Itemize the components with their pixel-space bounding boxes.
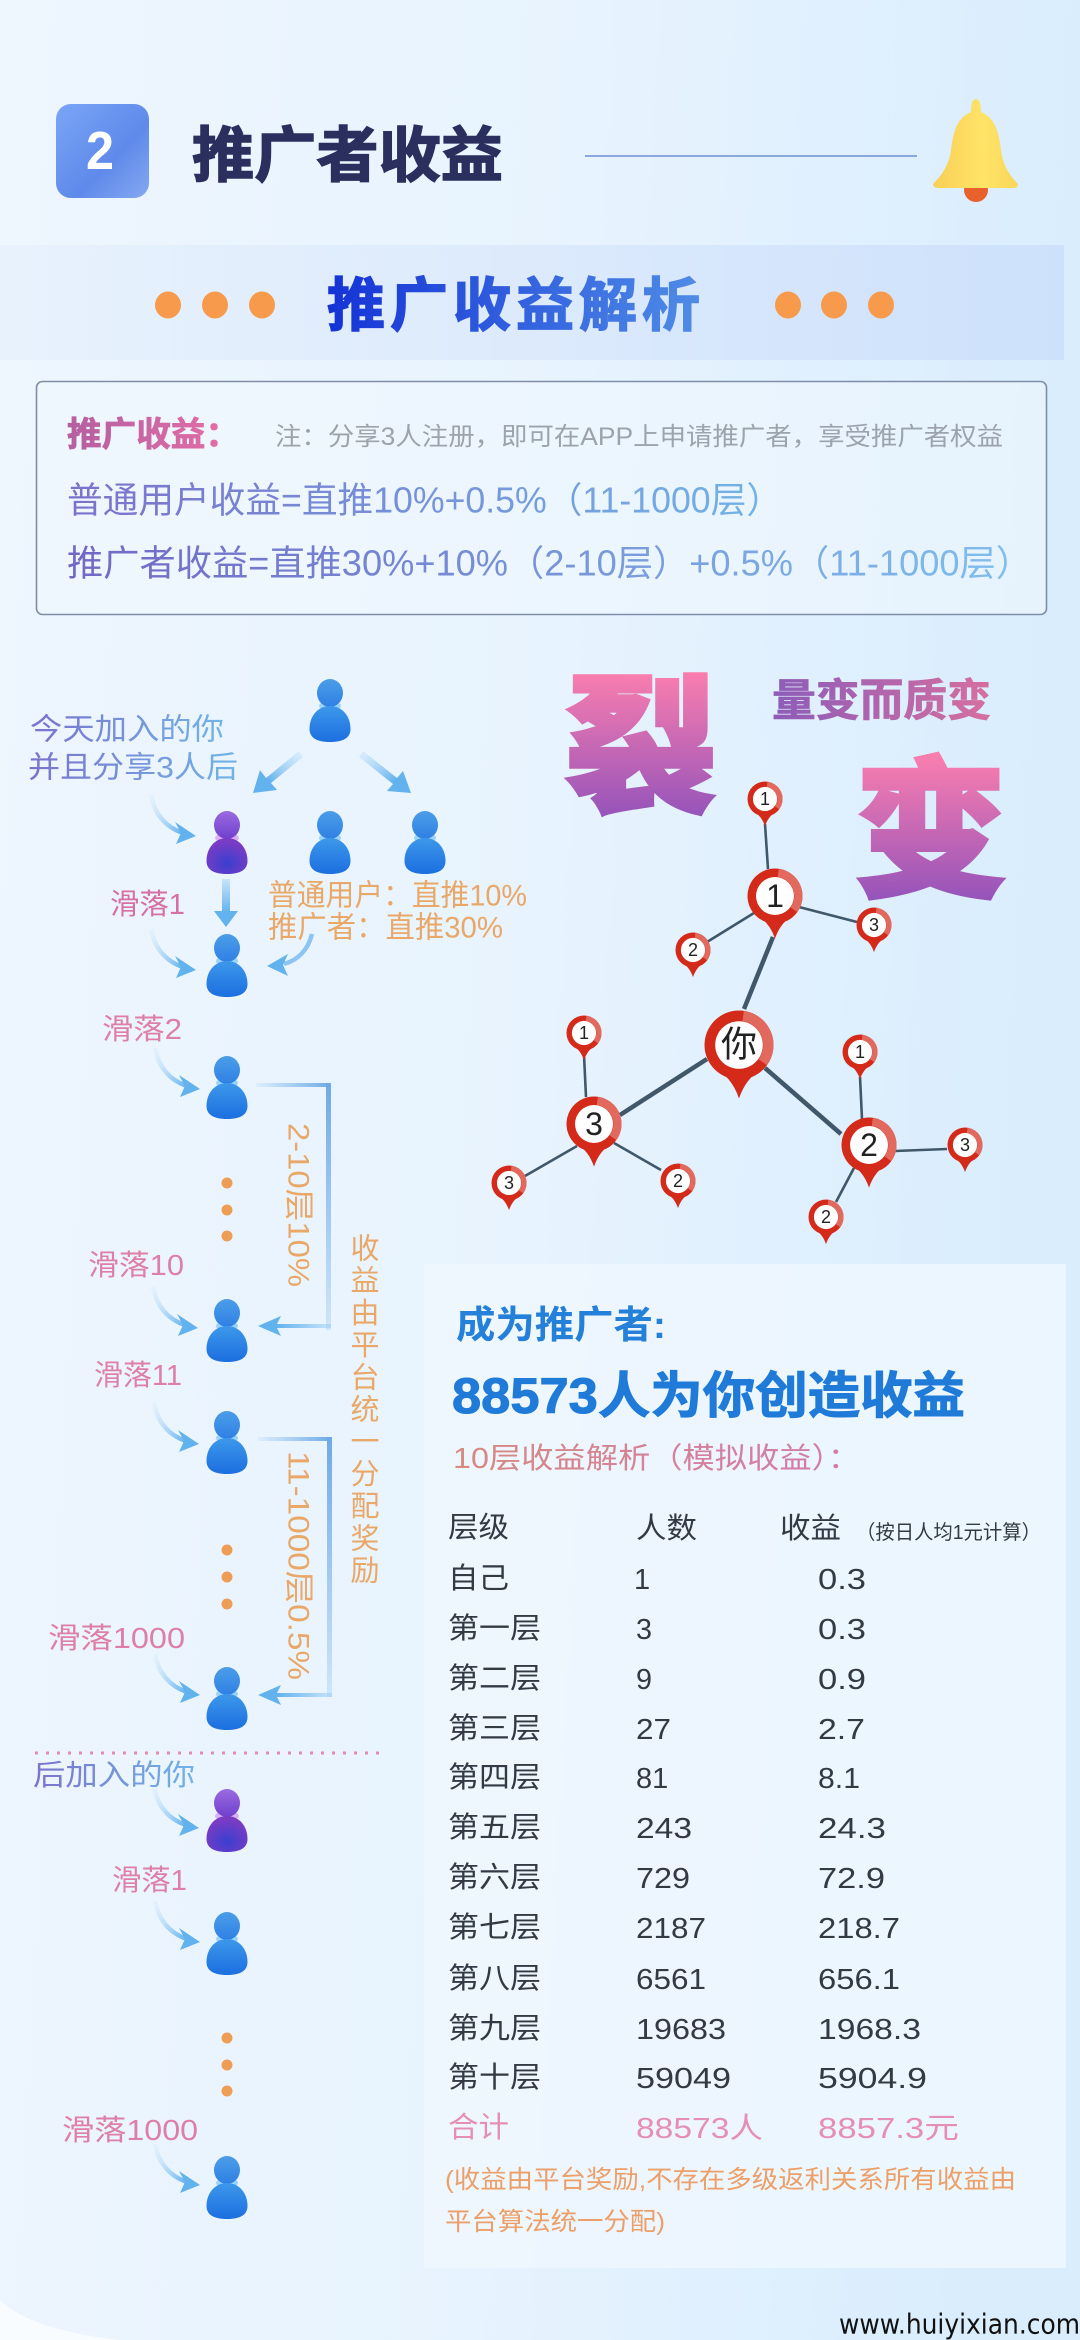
section badge: number 2: [56, 104, 149, 198]
pin: 3-3: 3: [504, 1173, 514, 1193]
label: later slide 1000: 滑落1000: [62, 2114, 198, 2147]
table header row: 人数: [636, 1512, 697, 1545]
network links: [525, 824, 947, 1202]
row: level 8: 第八层: [448, 1962, 541, 1995]
person: sibling one: [310, 811, 350, 874]
person: later slide 1000: [206, 2156, 248, 2219]
person: later slide 1: [206, 1912, 248, 1975]
table header row: （按日人均1元计算）: [856, 1521, 1041, 1544]
dots: omitted levels 12-999: [222, 1544, 232, 1610]
pin: branch 1: 1: [766, 878, 784, 914]
pin: 2-1: [842, 1034, 878, 1079]
row: level 9: 1968.3: [818, 2014, 921, 2046]
panel heading: 推广收益：: [67, 416, 240, 454]
person: later joiner: [206, 1789, 248, 1852]
label: slide 10: 滑落10: [88, 1249, 184, 1282]
pin: 1-1: [748, 782, 782, 826]
pin: 3-1: [566, 1016, 602, 1060]
label: after sharing: 并且分享3人后: [28, 752, 238, 784]
row: level 5: 24.3: [818, 1813, 886, 1845]
footnote: [445, 2166, 1016, 2236]
arrow: slide 1: [151, 929, 196, 978]
row: total: 合计: [448, 2111, 509, 2144]
pin: 2-1: 1: [855, 1042, 865, 1062]
row: level 2: 0.9: [818, 1664, 866, 1696]
pin: 1-1: 1: [760, 789, 770, 809]
row: level 4: 第四层: [448, 1761, 541, 1794]
bracket: levels 11-1000: [258, 1437, 332, 1705]
row: level 3: 2.7: [818, 1714, 865, 1746]
pin: 2-3: [948, 1128, 982, 1172]
bracket: levels 2-10: [256, 1083, 331, 1336]
pin: you: [704, 1010, 774, 1098]
pin: branch 1: [748, 868, 802, 939]
label: later slide 1: 滑落1: [112, 1864, 187, 1897]
pin: branch 2: 2: [860, 1127, 878, 1163]
label: slide 1: 滑落1: [110, 888, 185, 921]
row: level 2: 第二层: [448, 1662, 541, 1695]
row: level 4: [448, 1761, 860, 1795]
row: level 1: 0.3: [818, 1614, 866, 1646]
person: slide 11: [206, 1411, 248, 1474]
row: level 10: [448, 2061, 927, 2095]
label: levels 2-10 rate: 2-10层10%: [282, 1123, 314, 1287]
panel: earnings table: [424, 1264, 1066, 2268]
row: self: 自己: [448, 1562, 509, 1595]
row: level 7: 第七层: [448, 1911, 541, 1944]
formula: regular user: 普通用户收益=直推10%+0.5%（11-1000层）: [67, 480, 782, 520]
pin: branch 3: 3: [585, 1106, 603, 1142]
pin: 1-2: 2: [688, 940, 698, 960]
label: direct commission rates: [268, 880, 527, 944]
banner: 推广收益解析: [0, 245, 1064, 360]
row: level 1: 第一层: [448, 1612, 541, 1645]
row: total: [448, 2111, 959, 2145]
label: later joiner: 后加入的你: [33, 1759, 195, 1792]
row: level 3: 第三层: [448, 1712, 541, 1745]
label: levels 11-1000 rate: 11-1000层0.5%: [282, 1451, 314, 1680]
divider: later joiners: [35, 1752, 380, 1754]
row: self: [448, 1562, 866, 1596]
row: level 10: 第十层: [448, 2061, 541, 2094]
heading: 裂: 裂: [565, 665, 717, 833]
pin: you: 你: [721, 1024, 757, 1064]
arrow: later slide 1000: [155, 2144, 200, 2193]
pin: 3-2: [660, 1164, 696, 1208]
person: slide 2: [206, 1056, 248, 1119]
pin: 1-3: [856, 908, 892, 952]
heading: 变: 变: [855, 748, 1007, 916]
note text: 注：分享3人注册，即可在APP上申请推广者，享受推广者权益: [275, 423, 1003, 451]
label: platform distribution: 收益由平台统一分配奖励: [346, 1233, 380, 1587]
person: slide 10: [206, 1299, 248, 1362]
row: level 6: 729: [636, 1863, 690, 1895]
label: slide 1000: 滑落1000: [48, 1622, 185, 1655]
footnote: (收益由平台奖励,不存在多级返利关系所有收益由: [445, 2166, 1016, 2194]
row: level 5: 第五层: [448, 1811, 541, 1844]
row: level 5: [448, 1811, 886, 1845]
row: self: 0.3: [818, 1564, 866, 1596]
arrow: later slide 1: [155, 1901, 200, 1950]
label: slide 11: 滑落11: [94, 1359, 182, 1392]
row: level 9: 第九层: [448, 2012, 541, 2045]
pin: 3-2: 2: [673, 1171, 683, 1191]
row: level 8: 6561: [636, 1964, 706, 1996]
label: direct commission rates: 普通用户：直推10%: [268, 880, 527, 912]
pin: 2-3: 3: [960, 1135, 970, 1155]
row: level 6: 72.9: [818, 1863, 885, 1895]
pin: 2-2: [808, 1200, 844, 1244]
table header row: [448, 1511, 1041, 1545]
row: level 4: 8.1: [818, 1763, 860, 1795]
row: level 7: [448, 1911, 900, 1945]
section title: 推广者收益: [192, 122, 503, 190]
arrow: to left child: [253, 751, 303, 793]
row: level 1: 3: [636, 1614, 652, 1646]
row: level 10: 5904.9: [818, 2063, 927, 2095]
row: level 4: 81: [636, 1763, 668, 1795]
pin: 1-3: 3: [869, 915, 879, 935]
network diagram: [492, 782, 982, 1244]
arrow: to later joiner: [154, 1787, 199, 1836]
pin: 3-3: [492, 1166, 526, 1210]
person: sibling two: [404, 811, 446, 874]
row: level 8: [448, 1962, 900, 1996]
panel: earnings formulas: [36, 382, 1046, 614]
section badge: number 2: 2: [86, 121, 114, 181]
arrow: slide 11: [154, 1403, 199, 1452]
footnote: 平台算法统一分配): [445, 2208, 665, 2236]
banner right dots: [775, 292, 894, 318]
arrow: slide 1000: [155, 1654, 200, 1703]
row: level 3: 27: [636, 1714, 671, 1746]
headline number: 88573人为你创造收益: [452, 1368, 965, 1424]
row: level 9: [448, 2012, 921, 2046]
row: level 6: 第六层: [448, 1861, 541, 1894]
banner title: 推广收益解析: [327, 274, 700, 338]
icon: bell: [933, 99, 1018, 202]
person: top referrer: [310, 679, 350, 742]
row: level 5: 243: [636, 1813, 692, 1845]
arrow: slide 10: [153, 1287, 198, 1336]
arrow: slide 2: [155, 1048, 200, 1097]
label: slide 2: 滑落2: [102, 1013, 182, 1046]
dots: later omitted levels: [222, 2032, 232, 2096]
banner left dots: [155, 292, 275, 318]
panel heading: 成为推广者:: [456, 1305, 666, 1347]
label: direct commission rates: 推广者：直推30%: [268, 912, 503, 944]
row: level 2: 9: [636, 1664, 652, 1696]
arrow: direct to slide 1 person: [267, 934, 312, 976]
table subtitle: 10层收益解析（模拟收益）：: [453, 1442, 860, 1475]
row: level 8: 656.1: [818, 1964, 900, 1996]
arrow: to right child: [359, 751, 411, 793]
row: level 1: [448, 1612, 866, 1646]
row: total: 8857.3元: [818, 2113, 959, 2145]
person: you: [206, 811, 248, 874]
row: level 10: 59049: [636, 2063, 731, 2095]
row: total: 88573人: [636, 2113, 763, 2145]
pin: 3-1: 1: [579, 1023, 589, 1043]
person: slide 1: [206, 934, 248, 997]
label: today's you: 今天加入的你: [30, 714, 224, 746]
header rule: [585, 155, 917, 157]
pin: 1-2: [676, 932, 710, 977]
arrow: to you: [151, 795, 196, 844]
heading: 量变而质变: 量变而质变: [772, 676, 991, 726]
row: level 6: [448, 1861, 885, 1895]
row: level 7: 218.7: [818, 1913, 900, 1945]
dots: omitted levels 3-9: [222, 1178, 232, 1242]
flowchart: referral slide-down: [28, 679, 527, 2219]
pin: 2-2: 2: [821, 1207, 831, 1227]
row: level 7: 2187: [636, 1913, 706, 1945]
table header row: 层级: [448, 1511, 509, 1544]
row: level 9: 19683: [636, 2014, 726, 2046]
person: slide 1000: [206, 1667, 248, 1730]
row: level 3: [448, 1712, 865, 1746]
row: self: 1: [634, 1564, 650, 1596]
pin: branch 2: [842, 1118, 896, 1188]
table header row: 收益: [780, 1512, 841, 1545]
arrow: down from you: [214, 879, 238, 927]
formula: promoter: 推广者收益=直推30%+10%（2-10层）+0.5%（11-1000层）: [67, 542, 1032, 584]
row: level 2: [448, 1662, 866, 1696]
pin: branch 3: [566, 1096, 622, 1167]
